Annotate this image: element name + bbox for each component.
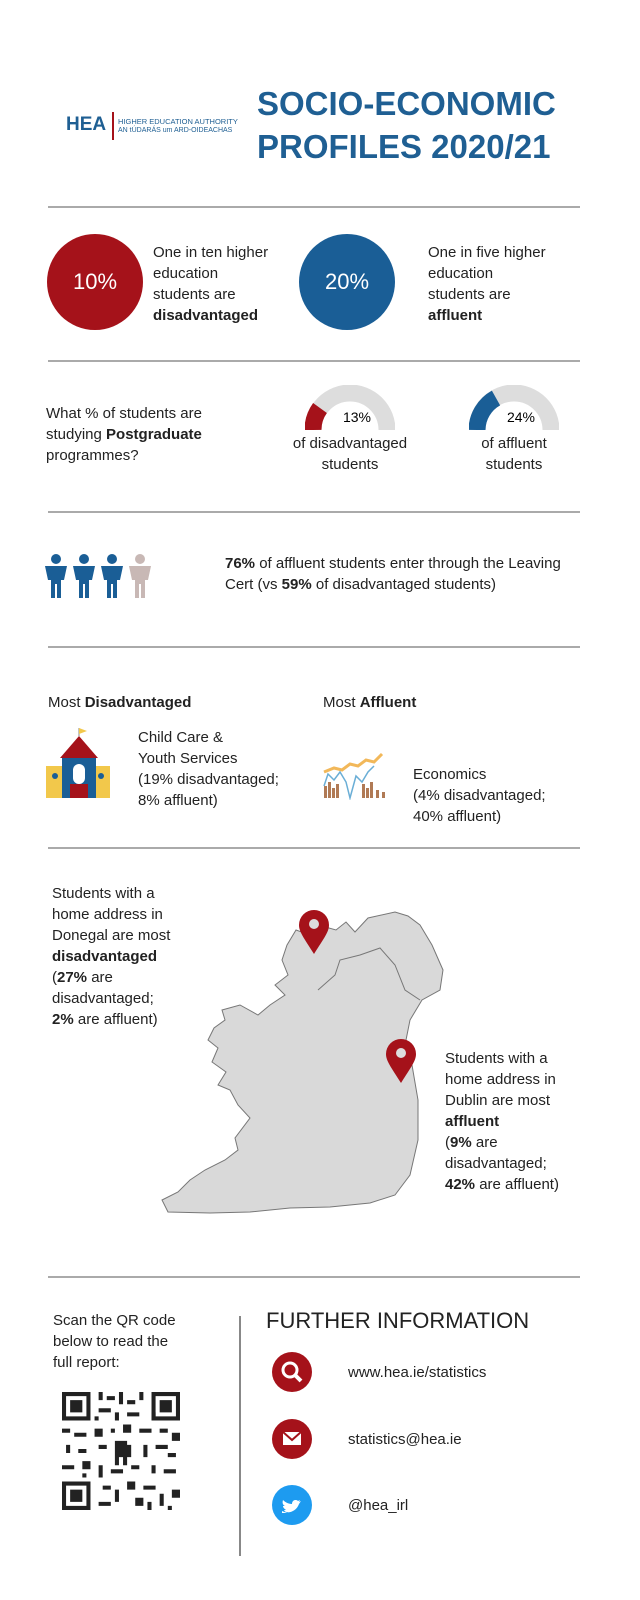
text scan qr bbox=[53, 1312, 176, 1371]
title bbox=[257, 85, 556, 165]
icon: pin dublin bbox=[386, 1039, 416, 1083]
text child care bbox=[138, 729, 279, 809]
text disadvantaged: disadvantaged bbox=[153, 307, 258, 324]
contact: website: www.hea.ie/statistics bbox=[348, 1364, 486, 1381]
map: ireland bbox=[161, 912, 444, 1214]
text dublin: disadvantaged; bbox=[445, 1155, 547, 1172]
text disadvantaged: students are bbox=[153, 286, 236, 303]
text dublin: Students with a bbox=[445, 1050, 548, 1067]
text child care: 8% affluent) bbox=[138, 792, 218, 809]
text leaving cert: 76% of affluent students enter through the Leaving bbox=[225, 555, 561, 572]
label affluent bbox=[481, 435, 547, 473]
text donegal: disadvantaged bbox=[52, 948, 157, 965]
text leaving cert: Cert (vs 59% of disadvantaged students) bbox=[225, 576, 496, 593]
question: What % of students are bbox=[46, 405, 202, 422]
text economics: 40% affluent) bbox=[413, 808, 501, 825]
text disadvantaged bbox=[153, 244, 268, 324]
gauge 13% bbox=[305, 385, 395, 430]
question bbox=[46, 405, 202, 464]
text scan qr: below to read the bbox=[53, 1333, 168, 1350]
text affluent bbox=[428, 244, 546, 324]
text child care: Youth Services bbox=[138, 750, 238, 767]
contact: twitter bbox=[272, 1485, 408, 1525]
label affluent: of affluent bbox=[481, 435, 547, 452]
icon: economics chart bbox=[323, 753, 385, 800]
heading most disadvantaged: Most Disadvantaged bbox=[48, 694, 191, 711]
text donegal: Donegal are most bbox=[52, 927, 170, 944]
text child care: Child Care & bbox=[138, 729, 223, 746]
heading further information: FURTHER INFORMATION bbox=[266, 1308, 529, 1333]
red circle 10% bbox=[47, 234, 143, 330]
qr code bbox=[62, 1392, 180, 1510]
panel: postgraduate bbox=[46, 385, 559, 473]
text dublin: (9% are bbox=[445, 1134, 498, 1151]
gauge 24% bbox=[469, 385, 559, 430]
text affluent: affluent bbox=[428, 307, 482, 324]
logo: HEA bbox=[66, 114, 106, 135]
text leaving cert bbox=[225, 555, 561, 593]
red circle 10%: 10% bbox=[73, 269, 117, 294]
text donegal: disadvantaged; bbox=[52, 990, 154, 1007]
text economics: Economics bbox=[413, 766, 486, 783]
logo: HIGHER EDUCATION AUTHORITY bbox=[118, 117, 238, 126]
logo: AN tÚDARÁS um ARD-OIDEACHAS bbox=[118, 127, 232, 134]
text donegal: home address in bbox=[52, 906, 163, 923]
text economics: (4% disadvantaged; bbox=[413, 787, 546, 804]
contact: email: statistics@hea.ie bbox=[348, 1431, 462, 1448]
text economics bbox=[413, 766, 546, 825]
text donegal: (27% are bbox=[52, 969, 113, 986]
gauge 13%: 13% bbox=[343, 409, 371, 425]
icon: castle bbox=[46, 728, 110, 798]
text affluent: One in five higher bbox=[428, 244, 546, 261]
gauge 24%: 24% bbox=[507, 409, 535, 425]
blue circle 20%: 20% bbox=[325, 269, 369, 294]
blue circle 20% bbox=[299, 234, 395, 330]
heading most affluent: Most Affluent bbox=[323, 694, 416, 711]
text dublin: 42% are affluent) bbox=[445, 1176, 559, 1193]
label affluent: students bbox=[486, 456, 542, 473]
icon: people bbox=[45, 554, 151, 598]
text scan qr: Scan the QR code bbox=[53, 1312, 176, 1329]
text affluent: education bbox=[428, 265, 493, 282]
label disadvantaged: students bbox=[322, 456, 378, 473]
text donegal: 2% are affluent) bbox=[52, 1011, 158, 1028]
question: programmes? bbox=[46, 447, 139, 464]
contact: twitter: @hea_irl bbox=[348, 1497, 408, 1514]
title: SOCIO-ECONOMIC bbox=[257, 85, 556, 122]
contact: website bbox=[272, 1352, 486, 1392]
label disadvantaged: of disadvantaged bbox=[293, 435, 407, 452]
text dublin bbox=[445, 1050, 559, 1193]
icon: pin donegal bbox=[299, 910, 329, 954]
text donegal bbox=[52, 885, 170, 1028]
panel: headline stats bbox=[47, 234, 546, 330]
text dublin: Dublin are most bbox=[445, 1092, 550, 1109]
title: PROFILES 2020/21 bbox=[257, 128, 550, 165]
label disadvantaged bbox=[293, 435, 407, 473]
logo bbox=[66, 112, 238, 140]
text child care: (19% disadvantaged; bbox=[138, 771, 279, 788]
text donegal: Students with a bbox=[52, 885, 155, 902]
text disadvantaged: One in ten higher bbox=[153, 244, 268, 261]
text affluent: students are bbox=[428, 286, 511, 303]
text dublin: affluent bbox=[445, 1113, 499, 1130]
text scan qr: full report: bbox=[53, 1354, 120, 1371]
text dublin: home address in bbox=[445, 1071, 556, 1088]
text disadvantaged: education bbox=[153, 265, 218, 282]
question: studying Postgraduate bbox=[46, 426, 202, 443]
contact: email bbox=[272, 1419, 462, 1459]
